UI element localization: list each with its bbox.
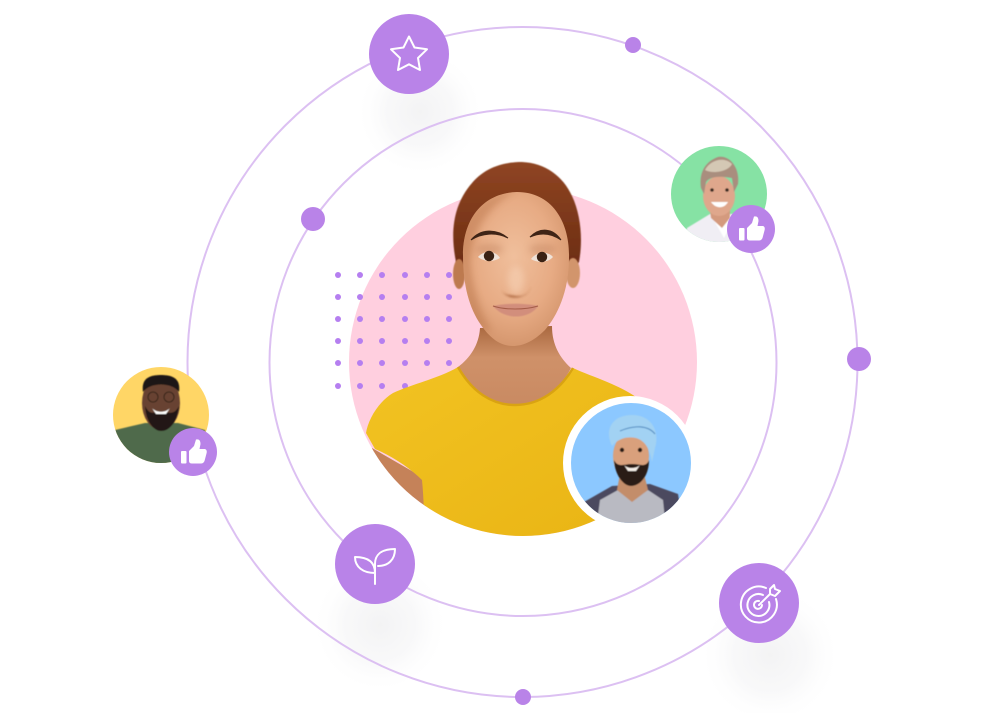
avatar: man in turban on blue bbox=[563, 396, 697, 530]
inner orbit ring bbox=[270, 109, 776, 616]
main portrait: woman in yellow shirt bbox=[366, 162, 640, 540]
face shading bbox=[463, 193, 554, 330]
thumbs-up badge: yellow avatar bbox=[169, 428, 217, 476]
orbit dots bbox=[301, 37, 871, 705]
face bbox=[463, 192, 569, 346]
soft shadows under icons bbox=[314, 50, 838, 713]
dot grid pattern bbox=[335, 272, 452, 389]
hair bbox=[453, 162, 581, 272]
orbit infographic bbox=[113, 14, 871, 705]
avatar: person on green bbox=[671, 146, 767, 245]
mouth bbox=[493, 304, 538, 317]
outer orbit ring bbox=[188, 27, 858, 697]
eyebrows bbox=[471, 231, 508, 240]
thumbs-up badge: green avatar bbox=[727, 205, 775, 253]
icon: sprout bbox=[335, 524, 415, 604]
eyes bbox=[478, 252, 500, 261]
icon: star bbox=[369, 14, 449, 94]
avatar: man on yellow bbox=[112, 367, 210, 470]
arm and torso bbox=[366, 367, 640, 540]
icon: target with arrow bbox=[719, 563, 799, 643]
ears bbox=[453, 259, 465, 289]
collar bbox=[458, 367, 573, 405]
neck bbox=[458, 326, 571, 405]
pink backdrop circle bbox=[349, 188, 697, 536]
